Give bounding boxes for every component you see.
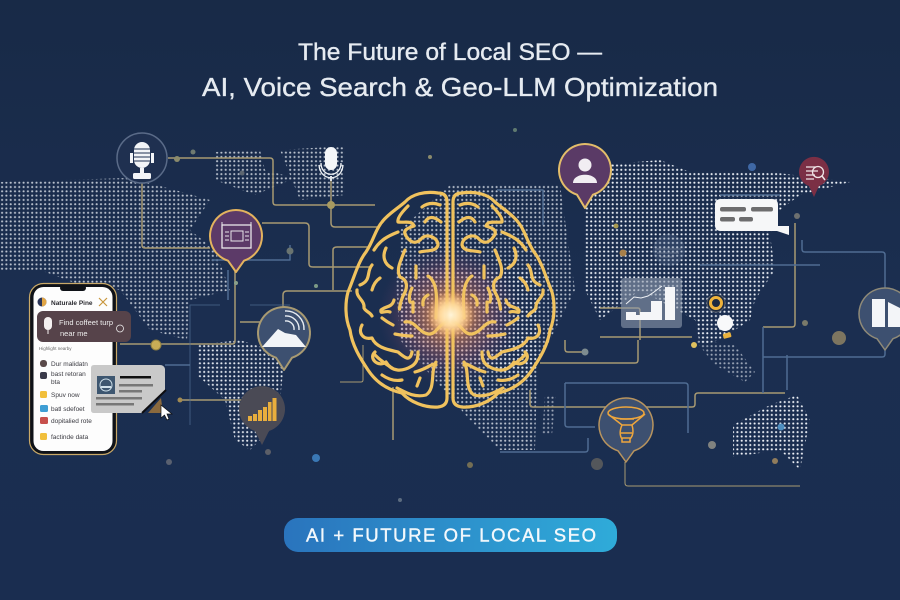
ghost pin xyxy=(653,234,685,266)
title xyxy=(202,39,718,102)
phone list: Dur malidatn xyxy=(51,361,88,368)
phone list: bast retoran xyxy=(51,371,86,378)
icon: voice microphone xyxy=(319,147,343,181)
phone list: Spuv now xyxy=(51,392,80,399)
pin: right chart xyxy=(859,288,900,350)
pin: search xyxy=(799,157,829,197)
phone mockup xyxy=(30,284,131,454)
phone list xyxy=(39,346,92,441)
title: The Future of Local SEO — xyxy=(298,39,602,66)
voice query bubble: Find coffeet turp xyxy=(59,318,113,327)
analytics card xyxy=(621,278,682,328)
phone header xyxy=(38,298,107,307)
brain left hemisphere xyxy=(346,192,447,407)
brain glow xyxy=(378,243,522,387)
pin: profile xyxy=(559,144,611,208)
brain xyxy=(346,192,554,407)
phone list: factinde data xyxy=(51,434,89,441)
voice query bubble: near me xyxy=(60,329,88,338)
pin: local listing xyxy=(210,210,262,272)
circuit lines xyxy=(120,158,885,486)
brain core light xyxy=(427,291,475,339)
pin: growth bars xyxy=(239,386,285,445)
badge: AI + future of local SEO xyxy=(284,518,617,552)
phone list: batl sdefoet xyxy=(51,406,85,413)
brain right hemisphere xyxy=(453,192,554,407)
phone list: dopitalied rote xyxy=(51,418,92,425)
location ring marker xyxy=(707,294,733,339)
title: AI, Voice Search & Geo-LLM Optimization xyxy=(202,72,718,102)
pin: funnel xyxy=(599,398,653,462)
listing card with cursor xyxy=(91,365,172,420)
phone list: bta xyxy=(51,379,60,386)
icon: studio microphone badge xyxy=(117,133,167,183)
badge: AI + future of local SEO: AI + FUTURE OF LOCAL SEO xyxy=(306,524,596,546)
pin: mountain signal xyxy=(258,307,310,370)
dotted world map xyxy=(0,146,850,470)
voice query bubble xyxy=(37,311,131,342)
phone list: Highlight nearby xyxy=(39,346,72,351)
speech bubble xyxy=(715,199,789,235)
connection nodes xyxy=(151,128,846,502)
phone header: Naturale Pine xyxy=(51,300,93,307)
